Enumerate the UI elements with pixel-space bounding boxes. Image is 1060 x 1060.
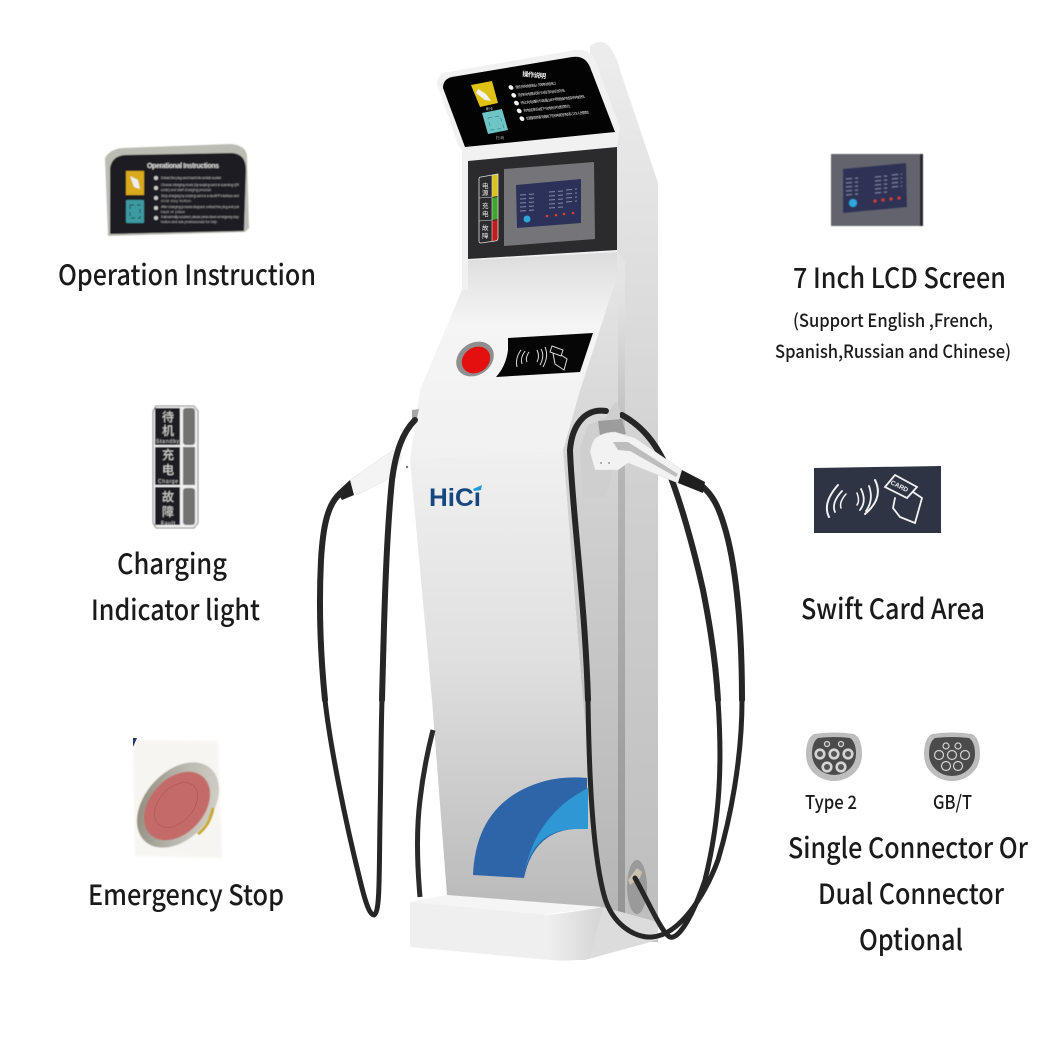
- right rear cable: [622, 415, 720, 937]
- status lights: [479, 174, 498, 243]
- charge label: [158, 447, 178, 485]
- instruction lines: 停止充电请刷卡或通过APP界面操作结束充电按钮: [520, 94, 586, 105]
- charge label: 电: [162, 463, 174, 477]
- cable port: [627, 860, 647, 914]
- right front cable: [570, 411, 742, 937]
- standby label: [156, 410, 180, 445]
- rear pillar: [590, 42, 658, 942]
- standby label: Standby: [156, 439, 180, 445]
- connector: GB/T: [924, 732, 980, 781]
- standby label: 机: [162, 424, 174, 438]
- heading: operation instruction: Operation Instruction: [58, 254, 316, 294]
- instruction lines: [508, 78, 591, 121]
- swipe icon: [471, 81, 498, 111]
- instruction bullets: back in place: [161, 210, 185, 214]
- type 2 label: Type 2: [805, 788, 857, 815]
- heading: charging indicator light: Indicator light: [91, 589, 260, 629]
- heading: connector options: [788, 827, 1028, 959]
- indicator light image: [153, 406, 198, 528]
- nozzle holder: [580, 402, 626, 498]
- card label: CARD: [889, 480, 909, 494]
- blue arc graphic: [473, 777, 588, 878]
- instruction lines: 请先将充电枪插入车辆充电接口: [514, 81, 557, 90]
- card scan icon: [126, 200, 144, 223]
- status lights: 充: [482, 201, 489, 210]
- side shadow strip: [618, 300, 625, 930]
- brand logo: HiCi: [429, 484, 481, 512]
- status lights: 电: [482, 181, 489, 190]
- right nozzle: [590, 432, 705, 493]
- instruction lines: 选择充电模式刷卡或扫码启动充电: [517, 88, 566, 97]
- heading: charging indicator light: Charging: [117, 543, 227, 583]
- front panel upper: [410, 252, 617, 460]
- fault label: 故: [162, 489, 174, 504]
- side channel: [563, 252, 625, 930]
- emergency stop photo: [121, 738, 235, 863]
- heading: charging indicator light: [91, 543, 260, 629]
- instruction bullets: After charging process stopped, extract the plug and put: [161, 205, 239, 209]
- language support note: Spanish,Russian and Chinese): [775, 338, 1011, 364]
- swipe card image: [814, 466, 941, 533]
- left short cable: [418, 730, 433, 897]
- instruction bullets: button and ask professionals for help: [161, 220, 217, 224]
- card reader: [496, 333, 593, 377]
- scan icon: [482, 109, 508, 140]
- body rivet: [406, 466, 408, 468]
- heading: connector options: Single Connector Or: [788, 827, 1028, 867]
- base plinth: [410, 895, 658, 961]
- instruction bullets: Extract the plug and insert into vehicle socket: [161, 176, 221, 180]
- heading: connector options: Dual Connector: [818, 873, 1004, 913]
- status lights: 源: [482, 188, 489, 197]
- heading: swift card area: Swift Card Area: [801, 588, 985, 628]
- left fin: [412, 409, 419, 422]
- heading: connector options: Optional: [859, 919, 963, 959]
- front panel lower: [410, 450, 603, 907]
- instruction bullets: click stop button: [161, 199, 191, 203]
- instruction bullets: If abnormally occurred, please press down emergency stop: [161, 215, 239, 219]
- panel title: 操作说明: [522, 69, 547, 81]
- left long cable: [320, 420, 415, 915]
- fault label: 障: [162, 504, 174, 519]
- instruction panel: [443, 57, 615, 147]
- status lights: 障: [482, 231, 489, 240]
- instruction bullets: [154, 176, 239, 224]
- instruction lines: 充电结束后拔下充电枪并放回原位: [522, 103, 571, 113]
- GB/T label: GB/T: [933, 788, 972, 815]
- swipe icon: 刷卡: [486, 106, 494, 111]
- operation instruction image: [105, 144, 249, 236]
- fault label: Fault: [161, 521, 176, 527]
- heading: LCD screen: 7 Inch LCD Screen: [793, 257, 1006, 297]
- LCD screen image: [831, 154, 923, 226]
- language support note: (Support English ,French,: [793, 307, 993, 333]
- status lights: 故: [482, 223, 489, 232]
- screen panel: [468, 147, 617, 259]
- status lights: 电: [482, 209, 489, 218]
- instruction bullets: Stop charging by swiping card or a via APP interface and: [161, 194, 239, 198]
- instruction lines: 如遇异常情况请按下急停按钮并联系工作人员帮助: [525, 110, 590, 121]
- charge label: 充: [162, 447, 174, 462]
- heading: emergency stop: Emergency Stop: [88, 874, 284, 914]
- left nozzle: [337, 450, 402, 500]
- fault label: [161, 489, 176, 527]
- instruction bullets: Choose charging mode (by swiping card or scanning QR: [161, 183, 239, 187]
- language support note: [775, 307, 1011, 364]
- standby label: 待: [162, 410, 174, 424]
- charging station: [410, 42, 658, 961]
- connector: type 2: [806, 732, 862, 781]
- card swipe icon: [126, 171, 144, 195]
- scan icon: 扫 码: [496, 135, 504, 140]
- instruction bullets: code) and start charging process: [161, 188, 211, 192]
- head surround: [437, 50, 620, 290]
- charge label: Charge: [158, 479, 178, 485]
- LCD screen: [504, 162, 595, 246]
- instruction card title: Operational Instructions: [147, 163, 219, 170]
- emergency stop button: [449, 334, 501, 384]
